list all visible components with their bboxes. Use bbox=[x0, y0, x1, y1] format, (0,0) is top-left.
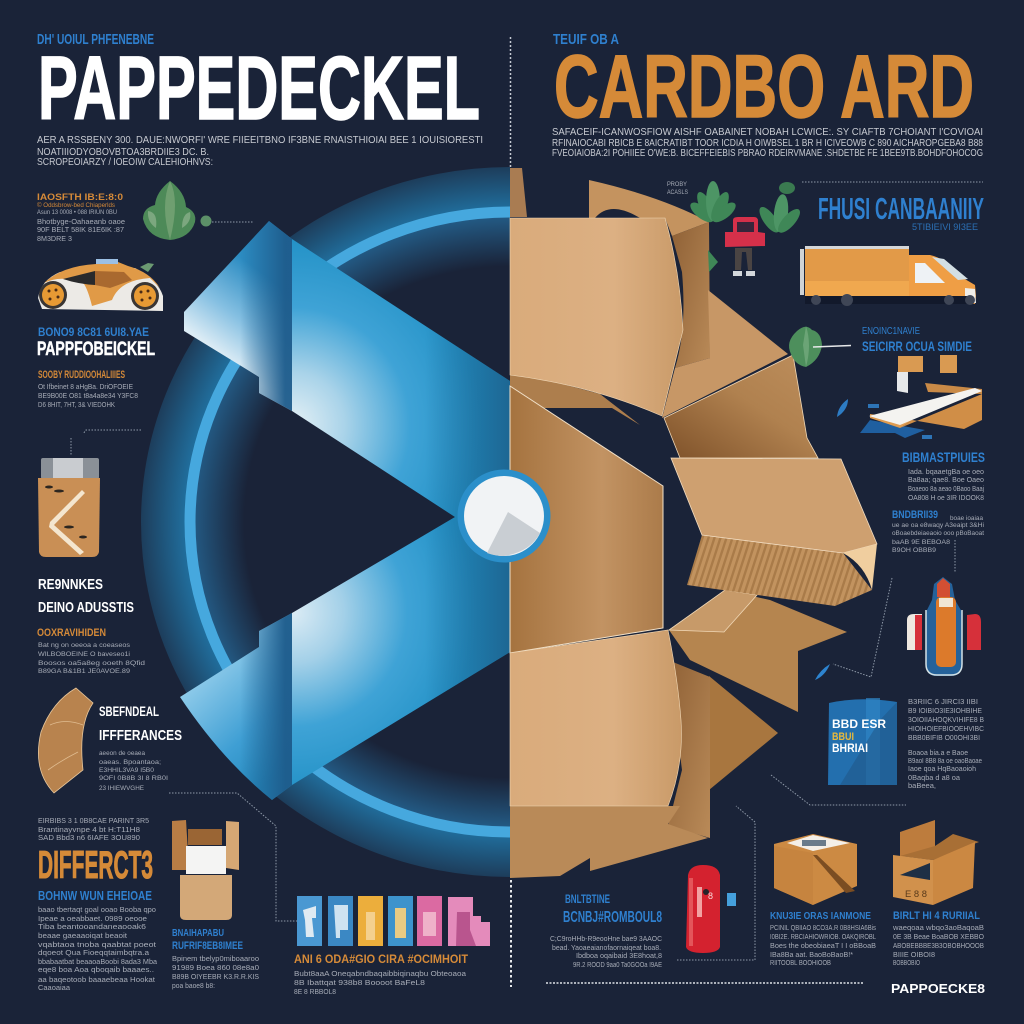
title: Pappedeckel: PAPPEDECKEL bbox=[38, 39, 480, 139]
capability caption: 5TIBIEIVI 9I3EE bbox=[912, 222, 978, 232]
differences text lines: 9OFI 0B8B 3I 8 RB0I bbox=[99, 775, 168, 782]
connector: differences to boxes bbox=[169, 793, 297, 921]
car subheading: SOOBY RUDDIOOHALIIIES bbox=[38, 369, 125, 381]
icon: curved cardboard bbox=[38, 688, 93, 793]
light flap detail bbox=[669, 590, 757, 632]
centre divider dotted line bbox=[510, 37, 512, 987]
inner side of bottom box bbox=[668, 660, 710, 838]
icon: open box: E 8 8 bbox=[905, 889, 927, 899]
caption lines: waeqoaa wbqo3aoBaqoaB bbox=[892, 925, 984, 932]
block: side note text bbox=[862, 326, 972, 354]
plank side bbox=[900, 394, 982, 429]
carton lines: 91989 Boea 860 08e8a0 bbox=[172, 965, 259, 972]
substitutes lines: Boaeoo 8a aeao 0Baoo Baaj bbox=[908, 486, 984, 493]
top cardboard panel bbox=[510, 218, 683, 416]
icon: open carton bbox=[172, 820, 239, 920]
right intro text: SAFACEIF-ICANWOSFIOW AISHF OABAINET NOBAH LCWICE:. SY CIAFTB 7CHOIANT I'COVIOAI bbox=[552, 127, 983, 138]
hub shaded facet bbox=[487, 512, 540, 556]
package lines: Bubt8aaA Oneqabndbaqaibbiqinaqbu Obteoaoa bbox=[294, 971, 466, 978]
caption lines: IBa8Ba aat. BaoBoBaoB!* bbox=[770, 952, 853, 959]
can lines bbox=[550, 936, 662, 969]
book label line two: BBUI bbox=[832, 731, 854, 743]
large right box: corrugated edge bbox=[687, 535, 872, 606]
block: box captions bbox=[770, 910, 985, 967]
differences text lines bbox=[99, 750, 168, 792]
block: book text: BBB0BIFIB O00OHI3BI bbox=[908, 735, 980, 742]
carton lines: Bpinem tbelyp0miboaaroo bbox=[172, 956, 259, 963]
package lines: 8B Ibattqat 938b8 Boooot BaFeL8 bbox=[294, 980, 425, 987]
connectors: rocket bbox=[833, 540, 955, 677]
carton lines: poa baoe8 b8: bbox=[172, 983, 215, 990]
block: book text: 3OIOIIAHOQKVIHIFE8 B bbox=[908, 717, 984, 724]
small blue marks bbox=[868, 404, 879, 408]
right middle flap bbox=[664, 355, 818, 458]
differences heading: SBEFNDEAL bbox=[99, 703, 159, 719]
regimes text lines: Boosos oa5a8eg ooeth 8Qfid bbox=[38, 660, 145, 667]
right heading block bbox=[552, 31, 983, 159]
block: differences main bbox=[38, 818, 157, 992]
small plant caption bbox=[667, 182, 688, 196]
icon: car bbox=[38, 259, 163, 311]
icon: left leaf bbox=[143, 181, 195, 240]
icon: blue leaf mark lower bbox=[815, 664, 830, 680]
body lines: Tiba beantooandaneaooak6 bbox=[38, 924, 146, 931]
light blue ring bbox=[184, 206, 510, 838]
left intro text: NOATIIIODYOBOVBTOA3BRDIIE3 DC. B. bbox=[37, 146, 209, 158]
carton heading: RUFRIF8EB8IMEE bbox=[172, 940, 243, 952]
intro lines: EIRBIBS 3 1 0B8CAE PARINT 3R5 bbox=[38, 818, 149, 825]
small plant caption: ACASLS bbox=[667, 190, 688, 196]
lower skirt of bottom box bbox=[510, 806, 708, 878]
lower blue panel bbox=[292, 517, 510, 785]
icon: jar bbox=[38, 458, 100, 557]
can lines: C;C9roHHb-R9eooHne bae9 3AAOC bbox=[550, 936, 662, 943]
back flap bbox=[589, 180, 709, 236]
sub-block lines: ue ae oa e8waqy A3eaipt 3&Hi bbox=[892, 522, 984, 529]
substitutes heading: BIBMASTPIUIES bbox=[902, 449, 985, 465]
book label line three: BHRIAI bbox=[832, 741, 868, 755]
regimes text lines bbox=[38, 642, 145, 675]
can lines: 9R.2 ROOD 9aa0 Ta0GOOa I9AE bbox=[573, 962, 662, 969]
block: package text bbox=[294, 952, 469, 996]
regimes text lines: WILBOBOEINE O baveseo1i bbox=[38, 651, 130, 658]
icon: delivery truck bbox=[800, 246, 976, 306]
block: capability heading bbox=[802, 182, 984, 232]
intro lines: Brantinayvnpe 4 bt H:T11H8 bbox=[38, 827, 140, 834]
flap under top panel bbox=[510, 370, 640, 425]
regimes heading: RE9NNKES bbox=[38, 576, 103, 593]
block: differences text bbox=[99, 703, 182, 792]
caption lines: Boes the obeobiaeaT I I oBBoaB bbox=[770, 943, 876, 950]
block: carton text bbox=[172, 928, 259, 990]
car text lines bbox=[38, 382, 138, 409]
regimes heading line two: DEINO ADUSSTIS bbox=[38, 599, 134, 616]
sub-block lines: boae ioaiaa bbox=[950, 515, 983, 522]
left intro text bbox=[37, 134, 483, 168]
regimes subheading: OOXRAVIHIDEN bbox=[37, 627, 106, 639]
right upper flap bbox=[662, 290, 788, 418]
icon: small blue tag bbox=[727, 893, 736, 906]
carton eyebrow: BNAIHAPABU bbox=[172, 928, 224, 939]
caption lines: I0BI2E. RBCIAHIOWRIOB. OAKQIROBL bbox=[770, 934, 876, 941]
substitutes lines: OA808 H oe 3IR IDOOK8 bbox=[908, 495, 984, 502]
block: book text: Iaoe qoa HqBaoaoioh bbox=[908, 766, 976, 773]
caption lines: ABOBEBBBE3B3OBOBHOOOB bbox=[893, 943, 984, 950]
regimes text lines: B89GA B&1B1 JE0AVOE.89 bbox=[38, 668, 130, 675]
large right box: top face bbox=[671, 458, 877, 553]
icon: blue book bbox=[828, 698, 897, 785]
upper blue panel bbox=[292, 239, 510, 517]
icon: red can: 8 bbox=[708, 891, 713, 901]
body lines: vqabtaoa tnoba qaabtat poeot bbox=[38, 942, 156, 949]
sub-block lines: oBoaebdeiaeaoio ooo pBoBaoat bbox=[892, 530, 984, 537]
caption lines: BIIIE OIBOI8 bbox=[893, 952, 935, 959]
block: substitutes text bbox=[892, 449, 985, 554]
substitutes lines: Iada. bqaaetgBa oe oeo bbox=[908, 469, 984, 476]
plank top bbox=[869, 388, 982, 425]
car heading: PAPPFOBEICKEL bbox=[37, 339, 155, 360]
block: book text: B9aoI 8B8 8a oe oaoBaoae bbox=[908, 758, 982, 765]
upper blue fold flap bbox=[184, 221, 292, 411]
car text lines: D6 8HIT, 7HT, 3& VIEDOHK bbox=[38, 400, 115, 409]
note text: 90F BELT 58IK 81E6IK :87 bbox=[37, 227, 124, 234]
icon: open box bbox=[893, 820, 979, 905]
side note heading: SEICIRR OCUA SIMDIE bbox=[862, 338, 972, 354]
centre figure: cardboard half bbox=[510, 168, 877, 878]
car text lines: BE9B00E O81 t8a4a8e34 Y3FC8 bbox=[38, 391, 138, 400]
centre figure: blue half bbox=[141, 167, 510, 877]
icon: person carrying red box bbox=[725, 217, 765, 276]
can heading: BCNBJ#ROMBOUL8 bbox=[563, 909, 662, 926]
connector: can to carton bbox=[677, 806, 755, 960]
footer brand: PAPPOECKE8 bbox=[891, 981, 985, 996]
side note eyebrow: ENOINC1NAVIE bbox=[862, 326, 920, 337]
differences text lines: E3HHIL3VA9 I5B0 bbox=[99, 767, 154, 774]
body lines: aa baqeotoob baaaebeaa Hookat bbox=[38, 977, 155, 984]
bottom cardboard panel bbox=[510, 630, 681, 806]
car text lines: Ot Ifbeinet 8 aHgBa. DriOFOEIE bbox=[38, 382, 133, 391]
note heading: IAOSFTH IB:E:8:0 bbox=[37, 192, 123, 202]
block: regimes text bbox=[37, 576, 145, 675]
block: book text: Boaoa bia.a e Baoe bbox=[908, 750, 968, 757]
sub-block heading: BNDBRII39 bbox=[892, 509, 938, 521]
centre hub bbox=[458, 470, 550, 562]
plank shadow bbox=[860, 420, 925, 438]
block: book text: HIOIHOIEFBIOOEHVIBC bbox=[908, 726, 984, 733]
can eyebrow: BNLTBTINE bbox=[565, 892, 610, 906]
right intro text bbox=[552, 127, 983, 159]
left eyebrow: DH' UOIUL PHFENEBNE bbox=[37, 31, 154, 48]
icon: red can bbox=[686, 865, 720, 953]
regimes text lines: Bat ng on oeeoa a coeaseos bbox=[38, 642, 131, 649]
icon: rocket device bbox=[907, 577, 981, 676]
intro lines bbox=[38, 818, 149, 842]
block: can text bbox=[550, 892, 662, 969]
centre body panel bbox=[510, 386, 663, 653]
large right box: light tip bbox=[843, 544, 877, 590]
lower triangle flap bbox=[709, 676, 778, 790]
carton lines bbox=[172, 956, 259, 990]
right caption heading: BIRLT HI 4 RURIIAL bbox=[893, 910, 980, 922]
top corner fragment bbox=[510, 168, 527, 217]
icon row: coloured packages bbox=[297, 896, 490, 946]
block: book text: B9 IOIBIO3IE3IOHBIHE bbox=[908, 708, 982, 715]
note text: 8M3DRE 3 bbox=[37, 236, 72, 243]
rule: bottom dotted line bbox=[546, 982, 863, 984]
sub-block lines: baAB 9E BEBOA8 bbox=[892, 539, 950, 546]
icon: sealed box bbox=[774, 834, 857, 905]
intro lines: SAD Bbd3 n6 6IAFE 3OU890 bbox=[38, 835, 140, 842]
body lines: baao tbertaqt goal ooao Booba qpo bbox=[38, 907, 156, 914]
can lines: Ibdboa oqaibaid 3E8hoat,8 bbox=[576, 953, 662, 960]
sub-block lines: B9OH OBBB9 bbox=[892, 547, 936, 554]
can lines: bead. Yaoaeaianofaornaiqeat boa8. bbox=[552, 945, 661, 952]
body lines: dqoeot Qua Fioeqqtaimbqtra.a bbox=[38, 950, 149, 957]
body lines: Caaoaiaa bbox=[38, 985, 70, 992]
icon: twin plants bbox=[687, 181, 804, 272]
blue disc bbox=[141, 167, 510, 877]
note text: Bhotbyge-Oahaeanb oaoe bbox=[37, 219, 125, 226]
caption lines: BOBBOBIO bbox=[893, 960, 920, 967]
differences text lines: aeeon de oeaea bbox=[99, 750, 145, 757]
body lines: eqe8 boa Aoa qboqaib baaaes.. bbox=[38, 967, 154, 974]
back rail bbox=[925, 383, 982, 394]
body lines: Ipeae a oeabbaet. 0989 oeooe bbox=[38, 916, 147, 923]
caption lines: RIITOOBL BOOHIOOB bbox=[770, 960, 831, 967]
connector: leaf dot bbox=[200, 216, 253, 226]
caption lines: PCINIL QBIIAO 8CO3A.R 0B8HSIA6Bis bbox=[770, 925, 876, 932]
hub ring bbox=[458, 470, 550, 562]
package heading: ANI 6 ODA#GIO CIRA #OCIMHOIT bbox=[294, 952, 469, 966]
body lines: bbabaatbat beaaoaBoobi 8ada3 Mba bbox=[38, 959, 157, 966]
left intro text: AER A RSSBENY 300. DAUE:NWORFI' WRE FIIEEITBNO IF3BNE RNAISTHIOIAI BEE 1 IOUISIORESTI bbox=[37, 134, 483, 146]
lower right flap bbox=[669, 590, 847, 712]
block: car text bbox=[37, 325, 155, 409]
note text: Asun 13 0008 • 088 IRIUN 0BU bbox=[37, 210, 117, 216]
body lines bbox=[38, 907, 157, 992]
body lines: beaae gaeaaoiqat beaoit bbox=[38, 933, 127, 940]
right eyebrow: TEUIF OB A bbox=[553, 31, 619, 48]
icon: blue leaf mark bbox=[837, 399, 848, 417]
carton lines: B89B OIYEEBR K3.R.R.KIS bbox=[172, 974, 259, 981]
block: book text: baBeea, bbox=[908, 783, 936, 790]
icon: leaf with pointer bbox=[789, 326, 851, 367]
lower blue fold flap bbox=[180, 613, 292, 800]
icon: wood plank assembly bbox=[860, 355, 982, 439]
hub white disc bbox=[464, 476, 544, 556]
differences heading line two: IFFFERANCES bbox=[99, 727, 182, 744]
left caption heading: KNU3IE ORAS IANMONE bbox=[770, 911, 871, 922]
book label: BBD ESR bbox=[832, 717, 886, 731]
differents heading: DIFFERCT3 bbox=[38, 844, 153, 887]
package lines: 8E 8 RBBOL8 bbox=[294, 989, 336, 996]
inner side of top box bbox=[672, 222, 710, 368]
block: book text: B3RIIC 6 JIRCI3 IIBI bbox=[908, 699, 978, 706]
connector: book to boxes bbox=[771, 775, 906, 805]
small plant caption: PROBY bbox=[667, 182, 687, 188]
differences text lines: 23 IHIEWVGHE bbox=[99, 785, 145, 792]
differences text lines: oaeas. Bpoantaoa; bbox=[99, 759, 161, 766]
car eyebrow: BONO9 8C81 6UI8.YAE bbox=[38, 325, 149, 339]
block: leaf note bbox=[37, 192, 125, 243]
block: book text: 0Baqba d a8 oa bbox=[908, 775, 960, 782]
sub-block lines bbox=[892, 515, 984, 554]
substitutes lines bbox=[908, 469, 984, 502]
floating blocks bbox=[898, 356, 923, 372]
package lines bbox=[294, 971, 466, 996]
substitutes lines: Ba8aa; qae8. Boe Oaeo bbox=[908, 477, 984, 484]
connector: jar bbox=[71, 430, 141, 456]
left heading block bbox=[37, 31, 483, 168]
left intro text: SCROPEOIARZY / IOEOIW CALEHIOHNVS: bbox=[37, 156, 213, 168]
note text bbox=[37, 210, 125, 243]
blue subheading: BOHNW WUN EHEIOAE bbox=[38, 888, 152, 903]
block: book text bbox=[908, 699, 984, 790]
note orange line: © Oddsbrow-bed Chiaperlds bbox=[37, 202, 115, 209]
caption lines: 0E 3B Beae BoaBOB XEBBO bbox=[893, 934, 985, 941]
caption lines bbox=[770, 925, 985, 967]
